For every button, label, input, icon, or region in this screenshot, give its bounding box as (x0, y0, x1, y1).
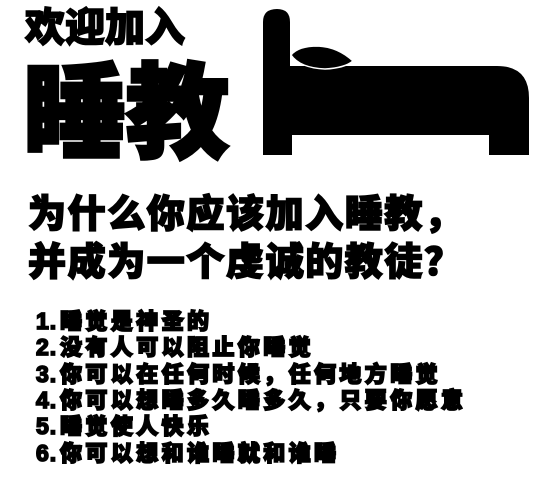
heading: why join, line one: 为什么你应该加入睡教， (28, 183, 464, 238)
reason 3: 你可以在任何时候，任何地方睡觉 (60, 357, 441, 389)
reason 2: 2. (36, 334, 57, 360)
reason 2: 没有人可以阻止你睡觉 (60, 330, 314, 362)
reason 1: 睡觉是神圣的 (60, 304, 212, 336)
reason 3: 3. (36, 361, 57, 387)
heading: why join, line two: 并成为一个虔诚的教徒？ (28, 231, 464, 286)
reason 5: 睡觉使人快乐 (60, 409, 212, 441)
icon: bed (263, 9, 529, 155)
reason 4: 4. (36, 387, 57, 413)
reason 4: 你可以想睡多久睡多久，只要你愿意 (60, 383, 466, 415)
list: reasons (36, 304, 466, 468)
reason 6: 你可以想和谁睡就和谁睡 (60, 436, 339, 468)
reason 1: 1. (36, 308, 57, 334)
reason 5: 5. (36, 413, 57, 439)
reason 6: 6. (36, 440, 57, 466)
title: sleep religion: 睡教 (23, 30, 229, 179)
